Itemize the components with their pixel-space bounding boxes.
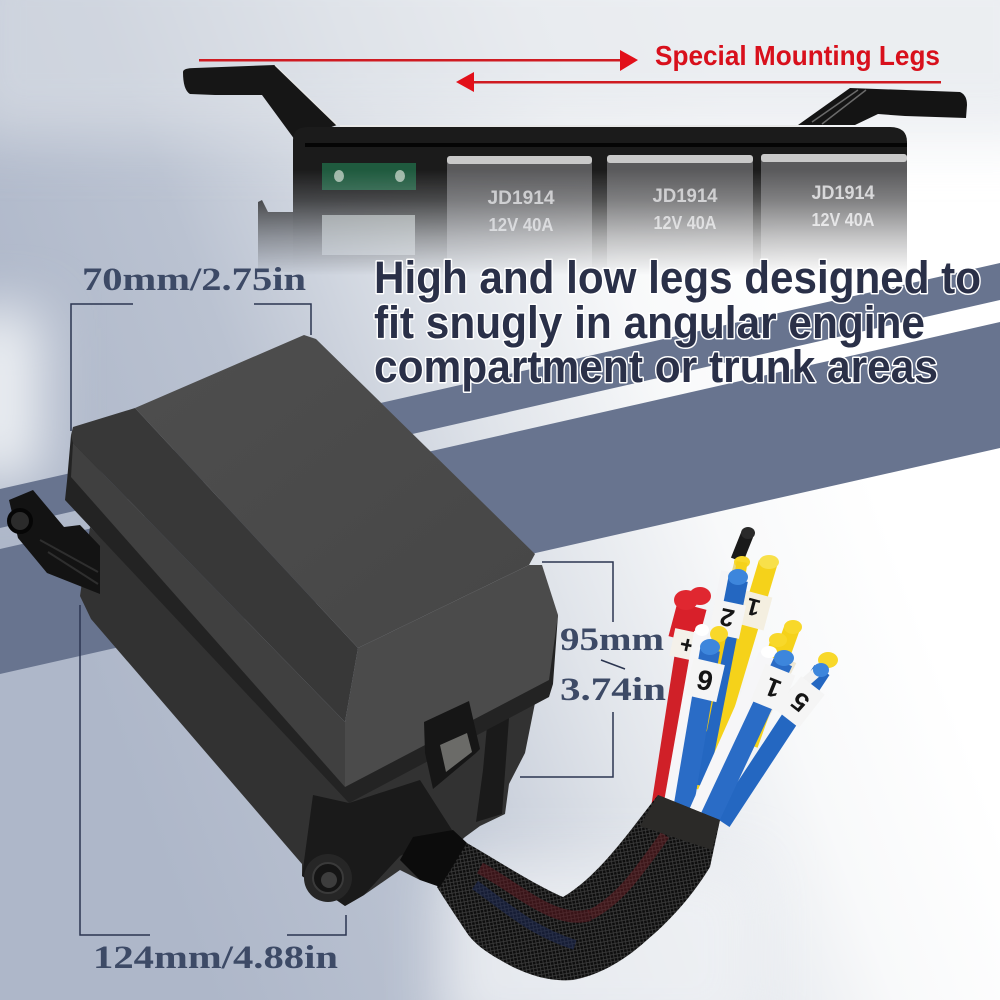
- lid right face: [345, 565, 558, 787]
- lid chamfer: [71, 408, 358, 722]
- relay 2: JD1914: [652, 186, 718, 207]
- harness collar: [400, 830, 467, 887]
- braided sleeve: [437, 795, 720, 980]
- white wire centre: [693, 646, 777, 822]
- relay 1: [447, 156, 592, 262]
- red arrow right: [199, 50, 638, 71]
- small yellow wire: [700, 626, 728, 730]
- lid front lower face: [71, 443, 345, 787]
- red wire: +: [677, 630, 697, 659]
- right mounting leg: [798, 88, 967, 125]
- dimension: width 70mm: [71, 262, 311, 431]
- dimension: height 95mm: 95mm: [560, 622, 664, 658]
- housing faded photo: [258, 125, 907, 271]
- dimension: length 124mm: [80, 605, 346, 976]
- relay 2: [607, 155, 753, 262]
- front clip: [424, 701, 480, 789]
- black wire: [730, 527, 755, 600]
- lid top face: [135, 335, 535, 648]
- relay 3: [761, 154, 907, 262]
- blue wire tall: [698, 569, 748, 785]
- blue wire far right: 5: [785, 686, 815, 718]
- yellow wires back: 1: [743, 592, 763, 621]
- headline: fit snugly in angular engine: [374, 297, 925, 348]
- dimension: height 95mm: [520, 562, 666, 777]
- second fuse: [322, 215, 415, 255]
- blue wire with label: 9: [694, 664, 716, 697]
- relay 3: JD1914: [812, 183, 875, 204]
- headline: [374, 252, 981, 392]
- box body: [80, 527, 545, 906]
- red arrow left: [456, 72, 941, 92]
- relay 2: 12V 40A: [654, 213, 716, 233]
- lid rim: [65, 435, 558, 803]
- body lower shade: [302, 780, 452, 906]
- left mounting leg: [183, 65, 337, 140]
- blue wire far right: [722, 652, 838, 822]
- lower latch: [476, 718, 509, 822]
- dimension: height 95mm: 3.74in: [560, 672, 666, 708]
- wire bundle: [661, 527, 838, 826]
- fuse box: [9, 335, 558, 906]
- blue wire centre: [706, 650, 795, 826]
- headline: compartment or trunk areas: [374, 341, 938, 392]
- white wire front: [670, 624, 709, 808]
- red wire: [661, 587, 711, 805]
- fuse green: [322, 163, 416, 190]
- relay 3: 12V 40A: [812, 210, 874, 230]
- top photo: relay housing with mounting legs: [183, 65, 967, 286]
- white wire back: [688, 572, 730, 780]
- blue wire centre: 1: [761, 671, 785, 705]
- dimension: length 124mm: 124mm/4.88in: [93, 940, 338, 976]
- blue wire with label: [682, 639, 725, 816]
- label: special mounting legs: Special Mounting Legs: [655, 40, 940, 71]
- dimension: width 70mm: 70mm/2.75in: [82, 262, 306, 298]
- yellow wires back: [700, 555, 802, 790]
- relay 1: JD1914: [488, 188, 555, 209]
- blue wire tall: 2: [717, 602, 737, 632]
- diagonal bands: [0, 263, 1000, 674]
- mounting boss: [304, 854, 352, 902]
- left mounting tab: [9, 490, 100, 594]
- relay 1: 12V 40A: [488, 215, 554, 235]
